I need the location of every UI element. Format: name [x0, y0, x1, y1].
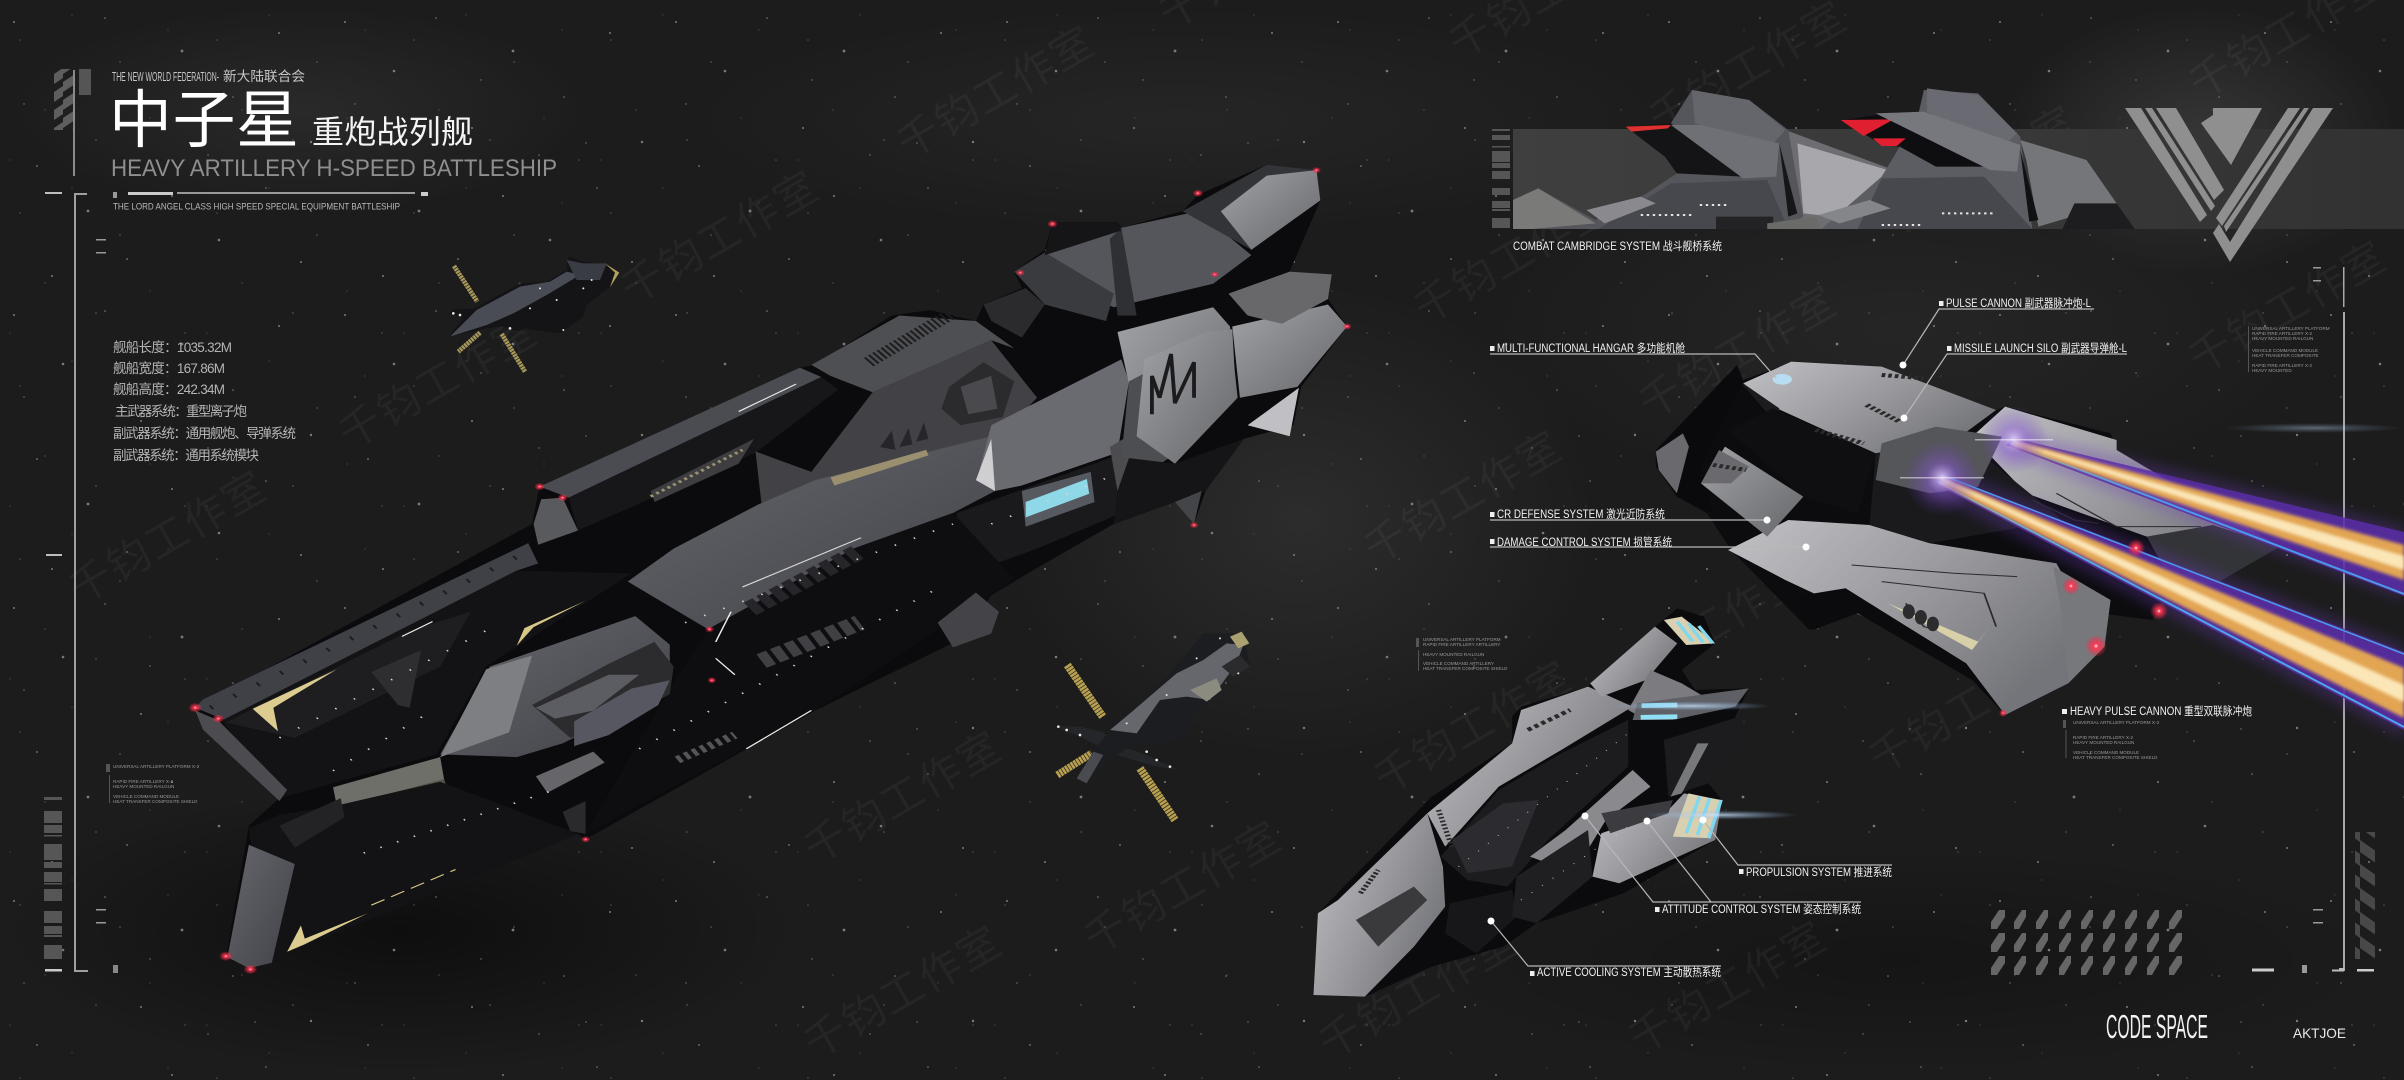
callout: multi-functional hangar: MULTI-FUNCTIONAL HANGAR 多功能机舱: [1497, 341, 1685, 355]
dark hull face: [1728, 408, 1876, 513]
centre dark: [1870, 437, 2062, 543]
watermarks: 千钧工作室: 千钧工作室: [889, 17, 1103, 168]
callout: multi-functional hangar: [1490, 341, 1776, 378]
top engine: [1664, 617, 1715, 645]
rear column: [1656, 365, 1743, 513]
stern fins and bridge: [984, 165, 1347, 524]
hazard stripes right: [2355, 832, 2375, 959]
watermarks: 千钧工作室: 千钧工作室: [286, 762, 500, 913]
black hull plates: [1441, 720, 1628, 887]
lower bow: [227, 782, 586, 968]
muzzle flares: [1900, 406, 2053, 516]
watermarks: 千钧工作室: 千钧工作室: [1621, 912, 1835, 1063]
specification list: 舰船高度：242.34M: [113, 381, 225, 397]
specification list: 副武器系统：通用系统模块: [113, 448, 260, 463]
small data note left: HEAT TRANSFER COMPOSITE SHIELD: [113, 799, 198, 804]
english title: HEAVY ARTILLERY H-SPEED BATTLESHIP: [111, 155, 557, 182]
centre hull plates: [586, 313, 1175, 834]
callout: CR defense: [1490, 507, 1770, 524]
title block: [109, 69, 557, 212]
main title 中子星: 中子星: [109, 86, 299, 156]
cockpit glow: [1773, 374, 1792, 385]
small data note top right: HEAT TRANSFER COMPOSITE: [2252, 353, 2319, 358]
small data note top right: HEAVY MOUNTED RAILGUN: [2252, 336, 2313, 341]
red lights: [1999, 539, 2168, 717]
escort ship upper left: [448, 257, 619, 372]
watermarks: 千钧工作室: 千钧工作室: [1311, 917, 1525, 1068]
main battleship: [188, 165, 1352, 974]
callout: damage control: [1490, 535, 1810, 550]
class caption: THE LORD ANGEL CLASS HIGH SPEED SPECIAL EQUIPMENT BATTLESHIP: [113, 202, 400, 212]
lower wing: [1728, 520, 2080, 715]
panel lines: [1852, 493, 2201, 637]
lower engine: [1673, 793, 1720, 838]
lower wing: [1592, 793, 1722, 883]
small data note heavy cannon: VEHICLE COMMAND MODULE: [2073, 750, 2139, 755]
black lower hull: [1794, 588, 2005, 715]
watermarks: 千钧工作室: 千钧工作室: [796, 917, 1010, 1068]
small data note top right: RAPID FIRE ARTILLERY X-2: [2252, 363, 2312, 368]
upper deck: [1427, 687, 1633, 847]
bridge ship two: [1767, 88, 2135, 229]
callouts: rear view ship: [1488, 812, 1892, 979]
lower hull side: [2053, 567, 2111, 683]
right wing: [1633, 688, 1749, 720]
turret block: [1701, 447, 1803, 537]
callout: attitude control: [1582, 812, 1861, 916]
small data note heavy cannon: HEAVY MOUNTED RAILGUN: [2073, 740, 2134, 745]
watermarks: 千钧工作室: 千钧工作室: [61, 462, 275, 613]
hull silhouette: [195, 165, 1347, 968]
small data note left: VEHICLE COMMAND MODULE: [113, 794, 179, 799]
mid engines: [1641, 705, 1677, 717]
subtitle 重炮战列舰: 重炮战列舰: [312, 114, 473, 150]
callout: pulse cannon: PULSE CANNON 副武器脉冲炮-L: [1946, 296, 2091, 310]
small data note left: UNIVERSAL ARTILLERY PLATFORM X-3: [113, 764, 199, 769]
watermarks: 千钧工作室: 千钧工作室: [1076, 812, 1290, 963]
gold lattice wings: [454, 266, 525, 372]
rear view ship lower: [1313, 608, 1798, 997]
band background: [1513, 129, 2404, 229]
hull silhouette: [1313, 608, 1749, 997]
federation line: THE NEW WORLD FEDERATION-: [112, 70, 219, 84]
lower deck: [1313, 813, 1445, 997]
engine flare streak: [2225, 423, 2403, 433]
small data note top right: VEHICLE COMMAND MODULE: [2252, 348, 2318, 353]
small data note left: RAPID FIRE ARTILLERY X-2: [113, 779, 173, 784]
black keel plates: [1445, 890, 1517, 953]
small data note top right: HEAVY MOUNTED: [2252, 368, 2292, 373]
callout: active cooling: [1488, 918, 1721, 979]
bridge ship one: [1513, 90, 1894, 229]
watermarks: 千钧工作室: 千钧工作室: [1406, 182, 1620, 333]
deck turret lines: [1360, 710, 1570, 893]
deck dark strip: [1740, 382, 1779, 423]
panel: combat bridge band: [1492, 88, 2404, 253]
beam two: [1926, 466, 2404, 738]
inner wing: [1530, 770, 1651, 863]
small data note centre: [1416, 637, 1508, 671]
watermarks: 千钧工作室: 千钧工作室: [613, 162, 827, 313]
bridge close-up ships: [1513, 88, 2135, 229]
callout: propulsion: PROPULSION SYSTEM 推进系统: [1746, 865, 1892, 879]
wing dark tail: [2147, 525, 2279, 585]
watermarks: 千钧工作室: 千钧工作室: [666, 472, 880, 623]
right dark wing: [1664, 717, 1744, 797]
block column: [1492, 129, 1510, 228]
label: combat bridge: COMBAT CAMBRIDGE SYSTEM 战斗舰桥系统: [1513, 239, 1722, 253]
right HUD frame: [2252, 267, 2375, 973]
watermarks: 千钧工作室: 千钧工作室: [1366, 652, 1580, 803]
small data note heavy cannon: [2063, 720, 2159, 760]
logo: eagle V emblem: [2125, 108, 2333, 262]
small data note top right: RAPID FIRE ARTILLERY X-2: [2252, 331, 2312, 336]
firing ship top view: [1656, 362, 2279, 715]
federation line: 新大陆联合会: [223, 69, 305, 84]
escort hull: [448, 257, 618, 337]
specification list: 舰船长度：1035.32M: [113, 340, 232, 355]
text: CODE SPACE: [2106, 1008, 2208, 1045]
callouts: firing ship: [1490, 296, 2252, 760]
upper slab: [195, 543, 632, 801]
escort ship lower centre: [1053, 632, 1250, 820]
small data note left: HEAVY MOUNTED RAILGUN: [113, 784, 174, 789]
callout: CR defense: CR DEFENSE SYSTEM 激光近防系统: [1497, 507, 1665, 521]
callout: missile silo: MISSILE LAUNCH SILO 副武器导弹舱-L: [1954, 341, 2127, 355]
credit: AKTJOE: AKTJOE: [2293, 1025, 2346, 1041]
beam one: [2000, 430, 2404, 600]
gold lattice wings: [1057, 665, 1190, 820]
vent rings: [1903, 604, 1939, 631]
lower turret assembly: [333, 616, 674, 823]
specification list: 舰船宽度：167.86M: [113, 360, 225, 376]
watermarks: 千钧工作室: 千钧工作室: [331, 307, 545, 458]
engine flares: [1646, 810, 1798, 820]
callout: missile silo: [1900, 341, 2127, 422]
specification list: [113, 340, 296, 463]
watermarks: 千钧工作室: 千钧工作室: [2181, 232, 2395, 383]
callout: heavy pulse cannon: HEAVY PULSE CANNON 重型双联脉冲炮: [2070, 704, 2252, 718]
pulse beams: [1900, 406, 2404, 738]
upper deck: [1743, 362, 1996, 453]
rear pod: [1656, 433, 1689, 493]
specification list: 副武器系统：通用舰炮、导弹系统: [113, 426, 296, 441]
top fin: [1590, 627, 1677, 697]
specification list: 主武器系统：重型离子炮: [115, 403, 247, 419]
escort cross wings: [1053, 726, 1178, 770]
icon: hazard stripes top left: [54, 69, 74, 130]
navigation lights: [188, 167, 1352, 974]
watermarks: 千钧工作室: 千钧工作室: [1601, 552, 1815, 703]
callout: propulsion: [1700, 816, 1892, 879]
small data note centre: HEAVY MOUNTED RAILGUN: [1423, 652, 1484, 657]
small data note centre: UNIVERSAL ARTILLERY PLATFORM: [1423, 637, 1501, 642]
hull silhouette: [1656, 362, 2279, 715]
left HUD frame: [44, 69, 118, 973]
callout: active cooling: ACTIVE COOLING SYSTEM 主动散热系统: [1537, 965, 1721, 979]
mid rail: [534, 368, 838, 545]
title rule: [113, 192, 428, 198]
watermarks: 千钧工作室: 千钧工作室: [1871, 97, 2085, 248]
small data note left: [106, 764, 199, 804]
dot grid decoration: [1991, 910, 2182, 975]
small data note heavy cannon: RAPID FIRE ARTILLERY X-2: [2073, 735, 2133, 740]
callout: attitude control: ATTITUDE CONTROL SYSTEM 姿态控制系统: [1662, 902, 1861, 916]
cream accent: [1888, 603, 1990, 650]
small data note heavy cannon: HEAT TRANSFER COMPOSITE SHIELD: [2073, 755, 2158, 760]
small data note centre: VEHICLE COMMAND ARTILLERY: [1423, 661, 1494, 666]
deck darker inset: [1356, 887, 1427, 947]
small data note top right: [2248, 326, 2330, 373]
right wing: [1972, 407, 2279, 585]
cannon housing: [1876, 427, 2002, 493]
watermarks: 千钧工作室: 千钧工作室: [1861, 632, 2075, 783]
fin strut: [1628, 670, 1704, 720]
watermarks: 千钧工作室: 千钧工作室: [1631, 277, 1845, 428]
small data note centre: RAPID FIRE ARTILLERY ARTILLERY: [1423, 642, 1500, 647]
small data note heavy cannon: UNIVERSAL ARTILLERY PLATFORM X-3: [2073, 720, 2159, 725]
watermarks: 千钧工作室: 千钧工作室: [796, 722, 1010, 873]
callout: pulse cannon: [1900, 296, 2094, 368]
watermarks: 千钧工作室: 千钧工作室: [1356, 422, 1570, 573]
escort hull: [1077, 633, 1250, 783]
turret cluster top: [1713, 375, 1924, 470]
small data note top right: UNIVERSAL ARTILLERY PLATFORM: [2252, 326, 2330, 331]
callout: damage control: DAMAGE CONTROL SYSTEM 损管系统: [1497, 535, 1672, 549]
small data note centre: HEAT TRANSFER COMPOSITE SHIELD: [1423, 666, 1508, 671]
